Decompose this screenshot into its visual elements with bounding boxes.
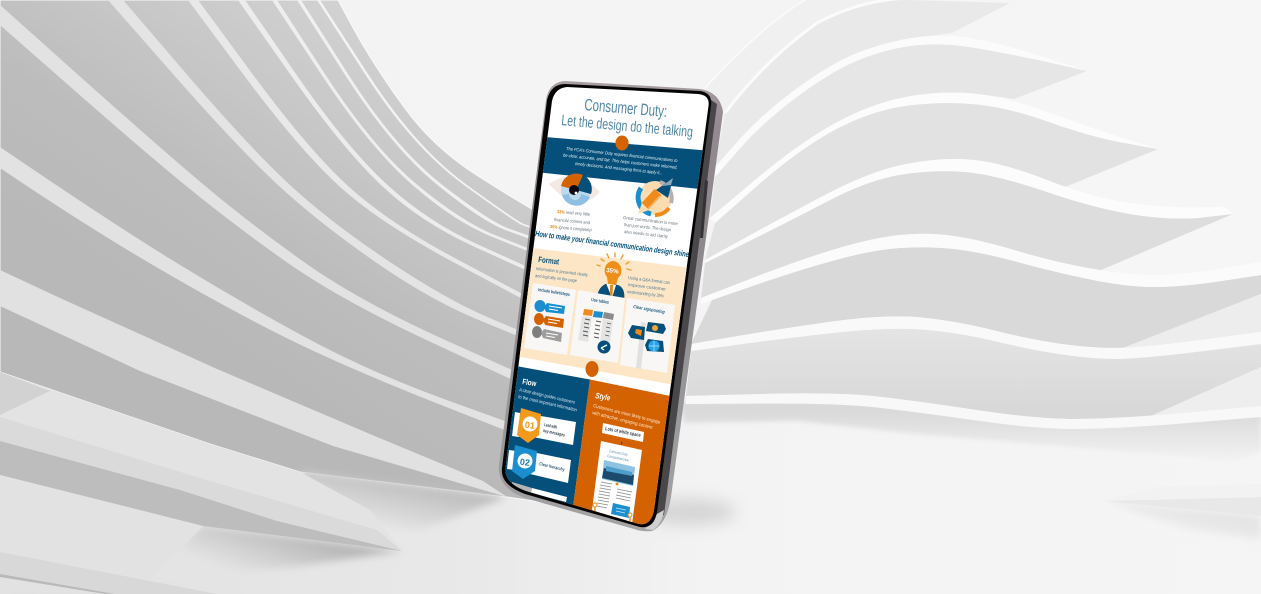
lower right wedge xyxy=(1103,501,1261,540)
document thumbnail: Consumer Duty xyxy=(609,449,628,457)
text: reading statistic: financial comms and xyxy=(554,217,591,225)
step 01: Lead with xyxy=(544,422,558,430)
title: Consumer Duty: xyxy=(584,96,668,121)
step 02: 02 xyxy=(519,457,531,468)
step 01: 01 xyxy=(524,420,536,431)
document thumbnail xyxy=(592,441,642,524)
panel: flow xyxy=(505,366,590,505)
intro band: be clear, accurate, and fair. This helps customers make informed, xyxy=(563,153,678,170)
right grey wedges xyxy=(705,0,908,113)
section heading: How to make your financial communication design shine xyxy=(535,229,690,259)
phone shadow xyxy=(648,499,736,525)
connector to document xyxy=(620,442,623,446)
title: Let the design do the talking xyxy=(561,112,694,141)
icon: lightbulb person with 35%: 35% xyxy=(606,267,619,276)
callout: lots of white space: Lots of white space xyxy=(605,426,641,439)
panel: style xyxy=(573,380,670,524)
text: communication note: Great communication is more xyxy=(623,215,679,226)
card: clear signposting xyxy=(620,298,675,373)
card: include bullets: Include bullet/steps xyxy=(538,287,571,297)
step 01 xyxy=(512,408,576,445)
step 02: Clear hierarchy xyxy=(539,461,566,472)
style heading: Style xyxy=(595,391,611,403)
text: communication note xyxy=(623,215,679,239)
text: reading statistic xyxy=(550,209,592,233)
left grey wall xyxy=(0,0,560,505)
step 01: key messages xyxy=(543,428,566,438)
text: Q&A stat: understanding by 35% xyxy=(627,289,664,299)
text: Q&A stat: Using a Q&A format can xyxy=(628,275,671,285)
format description xyxy=(535,266,589,283)
phone frame xyxy=(499,81,723,531)
card: clear signposting: Clear signposting xyxy=(633,304,665,315)
pin markers xyxy=(593,503,632,521)
side button xyxy=(700,180,708,238)
right white ribbons xyxy=(705,0,805,88)
format description: Information is presented clearly xyxy=(536,266,589,277)
format heading: Format xyxy=(538,255,560,267)
text: reading statistic: 33% read very little xyxy=(557,209,591,217)
screen content xyxy=(505,87,709,524)
flow description: to the most important information xyxy=(518,394,578,413)
style description: Customers are more likely to engage xyxy=(593,403,661,425)
icon: eye xyxy=(549,173,600,206)
icon: pen and pencil xyxy=(638,178,673,215)
card: use tables xyxy=(570,290,625,363)
card: include bullets xyxy=(524,283,576,355)
panel: format xyxy=(520,248,687,384)
style description: with attractive, engaging content xyxy=(592,410,654,430)
intro band: timely decisions. And messaging firms to apply it... xyxy=(575,161,663,175)
title xyxy=(561,96,694,141)
black bezel xyxy=(502,84,711,527)
icon: lightbulb person with 35% xyxy=(597,253,631,302)
left edge blue sliver xyxy=(525,172,541,300)
text: reading statistic: 36% ignore it completely! xyxy=(550,224,592,233)
intro band: The FCA's Consumer Duty requires financial communications to xyxy=(566,146,678,163)
callout: lots of white space xyxy=(602,423,644,442)
connector: orange dot xyxy=(586,361,598,377)
card: use tables: Use tables xyxy=(591,297,610,305)
document thumbnail: Comprehensive xyxy=(607,454,629,463)
phone mockup xyxy=(499,81,723,532)
step 02 xyxy=(507,445,571,483)
flow description: A clear design guides customers xyxy=(519,387,576,405)
format description: and logically on the page xyxy=(535,273,578,283)
text: Q&A stat xyxy=(627,275,671,299)
text: communication note: than just words. The design xyxy=(624,222,672,232)
flow heading: Flow xyxy=(522,377,538,388)
step 03 partial xyxy=(511,482,567,502)
intro band xyxy=(535,136,712,189)
text: communication note: also needs to aid clarity xyxy=(624,229,669,239)
text: Q&A stat: improve customer xyxy=(628,282,667,292)
